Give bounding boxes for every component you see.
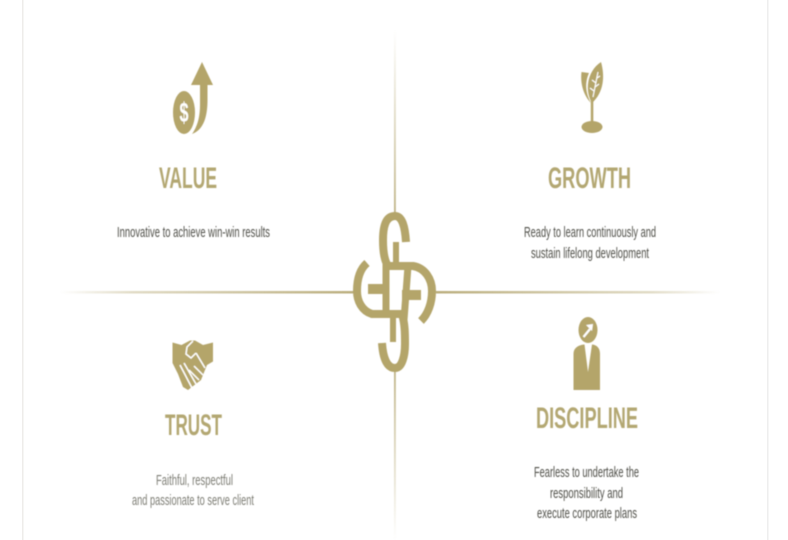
- panel: growth: [524, 62, 656, 241]
- text: trust description: Faithful, respectful: [156, 473, 233, 489]
- panel: value: [117, 62, 270, 241]
- icon: businessman with arrow head: [574, 317, 600, 390]
- panel: trust: [156, 340, 233, 489]
- heading: discipline: DISCIPLINE: [536, 402, 638, 435]
- text: growth description: Ready to learn continuously and: [524, 225, 656, 241]
- icon: coin with rising arrow: [173, 62, 213, 134]
- panel: discipline: [534, 317, 639, 481]
- heading: growth: GROWTH: [548, 162, 631, 195]
- text: value description: Innovative to achieve win-win results: [117, 225, 270, 241]
- heading: value: VALUE: [159, 162, 217, 195]
- text: growth description second line: sustain lifelong development: [531, 246, 649, 262]
- icon: handshake: [172, 340, 213, 390]
- heading: trust: TRUST: [165, 409, 222, 442]
- text: discipline description third line: execute corporate plans: [537, 506, 637, 522]
- text: trust description second line: and passionate to serve client: [132, 493, 254, 509]
- icon: leaf sprout: [581, 62, 603, 133]
- text: discipline description: Fearless to undertake the: [534, 465, 639, 481]
- text: discipline description second line: responsibility and: [550, 486, 623, 502]
- logo: central interlocking monogram: [357, 216, 432, 368]
- icon: coin with rising arrow: $: [180, 97, 189, 128]
